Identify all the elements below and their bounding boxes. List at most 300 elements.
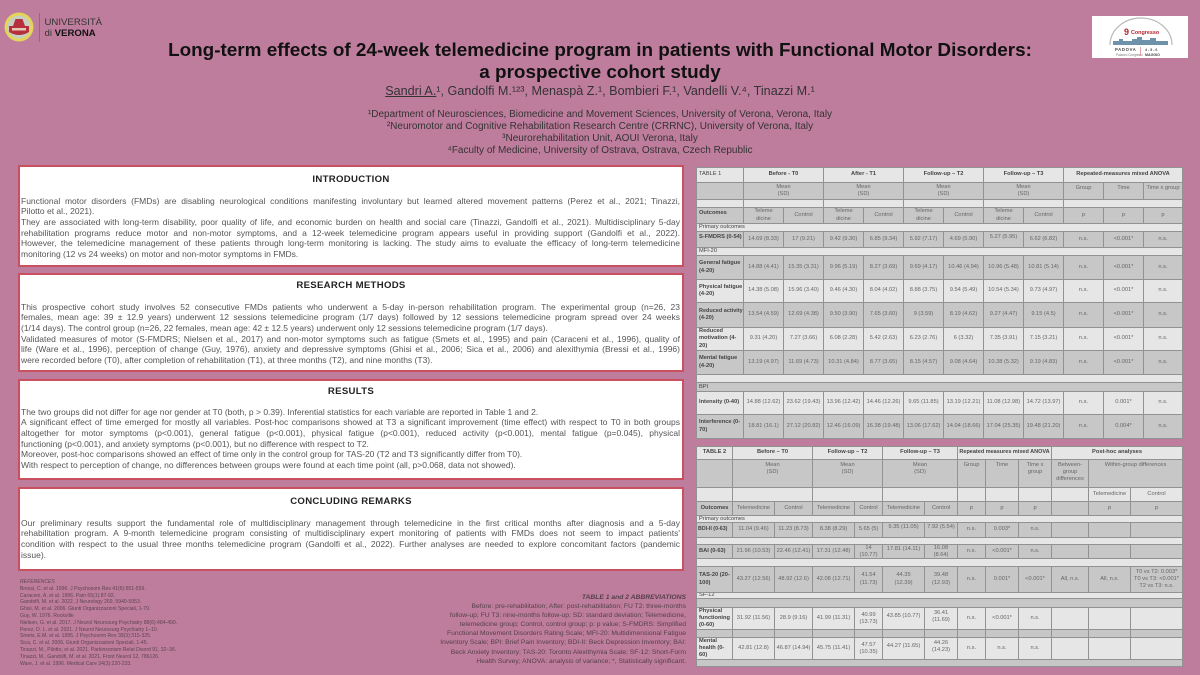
text: conclusions body (21, 518, 680, 560)
table 2: 14 (865, 545, 872, 551)
panel: results (18, 379, 684, 480)
table 1: 15.35 (3.31) (788, 264, 819, 270)
table 1: 11.69 (4.73) (788, 359, 819, 365)
table 1: n.s. (1079, 423, 1088, 429)
references: Bressi, C. et al. 1996. J Psychosom Res 41(6):551-559. (20, 586, 146, 592)
table 1: 5.42 (2.63) (870, 335, 897, 341)
table 1: 8.04 (4.02) (870, 287, 897, 293)
references: Nielsen, G. et al. 2017. J Neurol Neurosurg Psychiatry 88(6):484-490. (20, 620, 177, 626)
table 2: n.s. (1030, 548, 1040, 554)
table 2: functioning (699, 615, 730, 621)
affiliations: ²Neuromotor and Cognitive Rehabilitation Research Centre (CRRNC), University of Verona, Italy (387, 121, 813, 132)
table 2: All, n.s. (1061, 576, 1079, 582)
table 1: 9.73 (4.97) (1030, 287, 1057, 293)
abbreviations note: Health Survey; ANOVA: analysis of variance; *, Statistically significant. (476, 658, 686, 665)
table 1: 9.96 (5.19) (830, 264, 857, 270)
references: Perez, D. L. et al. 2021. J Neurol Neurosurg Psychiatry 1–10. (20, 627, 158, 633)
table 1: (SD) (778, 191, 789, 197)
abbreviations note (440, 594, 686, 665)
heading: results: RESULTS (328, 386, 374, 396)
table 1: 13.96 (12.42) (827, 399, 860, 405)
table 1: Outcomes (699, 210, 727, 216)
table 1: 12.46 (16.09) (827, 423, 860, 429)
icon: skyline and dome: Palazzo Congressi (1116, 53, 1143, 57)
table 1: 4.69 (5.90) (950, 236, 977, 242)
table 1: Mean (856, 184, 871, 190)
table 2: n.s. (967, 576, 976, 582)
table 2: Primary outcomes (699, 516, 745, 522)
table 1: Time x group (1147, 185, 1180, 191)
table 2: T0 vs T3: <0.001* (1134, 576, 1179, 582)
table 2: <0.001* (992, 548, 1012, 554)
table 1: 9.08 (4.64) (950, 359, 977, 365)
table 1: 19.48 (21.20) (1027, 423, 1060, 429)
abbreviations note: follow-up; FU T3: nine-months follow-up; SD: standard deviation; Telemedicine, (450, 612, 686, 619)
table 2: Telemedicine (737, 505, 770, 511)
table 1: 7.65 (3.60) (870, 311, 897, 317)
table 1: 9.27 (4.47) (990, 311, 1017, 317)
table 1: 10.54 (5.34) (988, 287, 1019, 293)
title: a prospective cohort study (479, 62, 721, 82)
table 1: (SD) (1018, 191, 1029, 197)
table 2: 36.41 (934, 610, 948, 616)
heading: introduction: INTRODUCTION (312, 174, 390, 184)
table 2: (13.73) (860, 618, 878, 624)
table 1: n.s. (1158, 399, 1168, 405)
table 2: Control (1147, 491, 1166, 497)
logo wordmark: di VERONA (44, 28, 96, 38)
table 2: p (1155, 505, 1158, 511)
table 1: MFI-20 (699, 248, 717, 254)
table 1: Control (874, 212, 893, 218)
references: Tinazzi, M., Gandolfi, M. et al. 2021. Front Neurol 12, 786126. (20, 654, 159, 660)
table 2: Post-hoc analyses (1092, 449, 1142, 455)
table 1: After - T1 (851, 171, 876, 177)
table 2: 41.99 (11.31) (817, 615, 850, 621)
table 1: 10.96 (5.48) (988, 264, 1019, 270)
table 1: 7.27 (3.66) (790, 335, 817, 341)
table 1: 16.38 (19.48) (867, 423, 900, 429)
table 2: 42.08 (12.71) (817, 576, 850, 582)
table 2: Within-group differences (1105, 462, 1166, 468)
panel: research methods (18, 273, 684, 372)
table 1: p (1161, 212, 1165, 218)
references: REFERENCES (20, 579, 55, 585)
table 2: n.s. (967, 548, 976, 554)
table 1: Reduced (699, 328, 723, 334)
table 2: 8.38 (8.29) (820, 526, 847, 532)
table 1: 27.12 (20.82) (787, 423, 820, 429)
references: Ware, J. et al. 1996. Medical Care 34(3):220-233. (20, 661, 132, 667)
text: results body: Moreover, post-hoc comparisons showed an effect of time only in the control group for TAS-20 (T2 and T3 significantly differ from T0). (21, 449, 522, 459)
table 2: 47.57 (861, 642, 876, 648)
table 1: 13.06 (17.62) (907, 423, 940, 429)
abbreviations note: Beck Anxiety Inventory; TAS-20: Toronto Alexithymia Scale; SF-12: Short-Form (451, 649, 686, 656)
table 1: 7.35 (3.91) (990, 335, 1017, 341)
table 2: n.s. (997, 645, 1007, 651)
text: methods body (21, 302, 680, 365)
table 2: 41.54 (861, 572, 876, 578)
affiliations (368, 109, 832, 156)
text: introduction body: Pilotto et al., 2021). (21, 206, 94, 216)
table 2: TAS-20 (20- (699, 572, 730, 578)
table 1: p (1082, 212, 1085, 218)
table 2: Physical (699, 608, 722, 614)
text: methods body: were recorded before (T0), after completion of rehabilitation (T1), at three months (T2), and nine months (T3). (21, 355, 432, 365)
table 1: Mean (936, 184, 951, 190)
table 1: 9.42 (9.30) (830, 236, 857, 242)
table 1: 13.19 (4.97) (748, 359, 779, 365)
table 1: 7.15 (3.21) (1030, 335, 1057, 341)
table 2: (SD) (914, 469, 926, 475)
table 2: n.s. (967, 645, 976, 651)
table 1: 9 (3.59) (914, 311, 933, 317)
table 2: 46.87 (14.94) (777, 645, 810, 651)
table 2: n.s. (1030, 615, 1040, 621)
table 2: (10.77) (860, 552, 878, 558)
table 1: (SD) (858, 191, 869, 197)
table 1: dicine (996, 216, 1011, 222)
references: Ghisi, M. et al. 2006. Giunti Organizzazioni Speciali, 1-79. (20, 606, 150, 612)
logo: 9th congress (1092, 16, 1188, 58)
table 1: TABLE 1 (699, 171, 721, 177)
table 1: 10.46 (4.94) (948, 264, 979, 270)
panel: concluding remarks (18, 487, 684, 571)
table 1: dicine (916, 216, 931, 222)
title (168, 40, 1032, 82)
table 1: Control (954, 212, 973, 218)
table 1: 70) (699, 426, 707, 432)
table 2: Time (996, 462, 1008, 468)
table 1: 8.15 (4.57) (910, 359, 937, 365)
table 1: Teleme (834, 208, 853, 214)
table 1: <0.001* (1114, 236, 1133, 242)
table 1: <0.001* (1114, 335, 1133, 341)
icon: skyline and dome (1109, 17, 1173, 57)
table 2: 100) (699, 580, 710, 586)
abbreviations note: Inventory Scale; BPI: Brief Pain Inventory; BDI-II: Beck Depression Inventory; BAI: (440, 639, 686, 646)
table 2: Group (964, 462, 979, 468)
table 1: S-FMDRS (0-54) (699, 234, 742, 240)
table 1: n.s. (1158, 423, 1168, 429)
table 1: 6.85 (9.34) (870, 236, 897, 242)
table 2: <0.001* (1025, 576, 1045, 582)
table 1: n.s. (1158, 359, 1168, 365)
table 1 (696, 167, 1183, 439)
table 1: 13.19 (12.21) (947, 399, 980, 405)
table 1: n.s. (1158, 287, 1168, 293)
text: results body: A significant effect of time emerged for mostly all variables. Post-hoc comparisons showed at T3 a significant improvement (time effect) with respect to T0 in both groups (21, 417, 680, 427)
table 1: Group (1076, 185, 1091, 191)
affiliations: ⁴Faculty of Medicine, University of Ostrava, Ostrava, Czech Republic (448, 145, 752, 156)
table 2: 45.75 (11.41) (817, 645, 850, 651)
table 2: 39.48 (934, 572, 948, 578)
table 2: T0 vs T2: 0.003* (1136, 569, 1177, 575)
text: results body (21, 406, 680, 470)
table 1: 5.27 (5.95) (990, 234, 1017, 240)
table 1: 17 (9.21) (792, 236, 815, 242)
table 2: T2 vs T3: n.s. (1139, 583, 1174, 589)
table 1: 10.81 (5.14) (1028, 264, 1059, 270)
table 2: (0-60) (699, 622, 714, 628)
table 2: Follow-up – T3 (900, 449, 940, 455)
table 1: 18.81 (16.1) (748, 423, 779, 429)
table 2: 44.27 (11.65) (887, 643, 920, 649)
table 1: Follow-up – T2 (924, 171, 963, 177)
abbreviations note: Functional Movement Disorders Rating Scale; MFI-20: Multidimensional Fatigue (447, 630, 686, 637)
text: results body: functioning (p<0.001), and anxiety symptoms (p<0.001), but no difference with respect to T2. (21, 439, 369, 449)
table 1: 14.38 (5.08) (748, 287, 779, 293)
table 1: 9.15 (4.5) (1031, 311, 1056, 317)
text: introduction body: Functional motor disorders (FMDs) are disabling neurological conditions manifesting involuntary but learned altered movement patterns (Perez et al., 2021; Tinazzi, (21, 196, 680, 206)
table 1: <0.001* (1114, 264, 1133, 270)
table 1: 9.31 (4.20) (750, 335, 777, 341)
table 1: Follow-up – T3 (1004, 171, 1043, 177)
table 1: 8.27 (3.69) (870, 264, 897, 270)
table 2: differences (1056, 476, 1084, 482)
table 1: 6.62 (6.82) (1030, 236, 1057, 242)
table 2: Outcomes (701, 505, 728, 511)
text: introduction body: They are associated with long-term disability, poor quality of life, and economic burden on health and social care (Tinazzi, Gandolfi et al., 2021). Multidisciplinary 5-day (21, 217, 680, 227)
table 1: Mean (776, 184, 791, 190)
table 2: 21.96 (10.53) (737, 548, 770, 554)
table 2: (12.39) (894, 580, 913, 586)
table 1: (4-20) (699, 268, 714, 274)
abbreviations note: telemedicine group; Control, control group; p: p value; S-FMDRS: Simplified (460, 621, 686, 628)
table 1: 10.38 (5.32) (988, 359, 1019, 365)
table 2: Follow-up – T2 (828, 449, 867, 455)
table 2: 48.92 (12.6) (778, 576, 809, 582)
table 1: Teleme (994, 208, 1013, 214)
table 2: 28.9 (9.16) (780, 615, 807, 621)
abbreviations note: Before: pre-rehabilitation; After: post-rehabilitation; FU T2: three-months (472, 603, 686, 610)
table 2: Telemedicine (1093, 491, 1126, 497)
table 1: motivation (4- (699, 335, 736, 341)
text: conclusions body: Our preliminary results support the fundamental role of multidisciplinary management through telemedicine in the first critical months after diagnosis and a 5-day (21, 518, 680, 528)
table 2: 31.92 (11.56) (737, 615, 770, 621)
table 1: n.s. (1079, 311, 1088, 317)
table 2: p (1000, 505, 1004, 511)
table 1: Repeated-measures mixed ANOVA (1076, 171, 1170, 177)
table 2: n.s. (967, 615, 976, 621)
table 2: Mental (699, 638, 717, 644)
table 1: 11.08 (12.98) (987, 399, 1020, 405)
table 1: dicine (756, 216, 771, 222)
table 2: 16.08 (934, 545, 948, 551)
table 1: Before - T0 (769, 171, 798, 177)
references: Smets, E.M. et al. 1995. J Psychosom Res 39(3):315-325. (20, 633, 151, 639)
table 1: Mental fatigue (699, 355, 737, 361)
table 2: (8.64) (934, 552, 948, 558)
divider bar (39, 13, 40, 42)
table 2: 60) (699, 652, 707, 658)
table 1: 13.54 (4.59) (748, 311, 779, 317)
table 2: BAI (0-63) (699, 548, 726, 554)
table 2: Before – T0 (757, 449, 788, 455)
table 1: 14.46 (12.26) (867, 399, 900, 405)
table 2: n.s. (967, 526, 976, 532)
table 1: 6.08 (2.28) (830, 335, 857, 341)
table 1: 9.46 (4.30) (830, 287, 857, 293)
table 1: 14.72 (13.97) (1027, 399, 1060, 405)
text: methods body: (1/14 days). The control group (n=26, 22 females, mean age: 42 ± 12.5 years) underwent only 12 sessions telemedicine program (1/7 days). (21, 323, 548, 333)
table 1: General fatigue (699, 260, 740, 266)
references (20, 579, 177, 667)
table 2: (SD) (767, 469, 778, 475)
table 2: (12.93) (932, 580, 950, 586)
text: methods body: life (Ware et al., 1996), perception of change (Guy, 1976), anxiety and depressive symptoms (Ghisi et al., 2006; Sica et al., 2006) and alexithymia (Bressi et al., 1996) (21, 344, 680, 354)
table 2: Repeated measures mixed ANOVA (959, 449, 1050, 455)
text: introduction body: rehabilitation programs reduce motor and non-motor symptoms, and a 12-week telemedicine program appears useful in providing support (Gandolfi et al., 2022). (21, 228, 680, 238)
table 1: n.s. (1158, 311, 1168, 317)
table 2: 17.31 (12.48) (817, 548, 850, 554)
table 1: 0.001* (1115, 399, 1132, 405)
table 1: 9.54 (5.49) (950, 287, 977, 293)
table 2: 5.65 (5) (859, 526, 878, 532)
table 1: Mean (1016, 184, 1031, 190)
table 1: 15.96 (3.40) (788, 287, 819, 293)
table 2: 9.35 (11.05) (888, 524, 919, 530)
table 1: 8.88 (3.75) (910, 287, 937, 293)
heading: concluding remarks: CONCLUDING REMARKS (290, 496, 412, 506)
authors: Sandri A.¹, Gandolfi M.¹²³, Menaspà Z.¹, Bombieri F.¹, Vandelli V.⁴, Tinazzi M.¹ (385, 84, 815, 98)
table 2: 43.85 (10.77) (887, 613, 920, 619)
table 2: All, n.s. (1100, 576, 1119, 582)
table 2: Between- (1058, 462, 1082, 468)
table 1: p (1122, 212, 1125, 218)
table 1: <0.001* (1114, 287, 1133, 293)
table 1: 9.69 (4.17) (910, 264, 937, 270)
table 1: 14.69 (8.33) (748, 236, 779, 242)
icon: skyline and dome: 9 (1124, 27, 1129, 37)
references: Sica, C. et al. 2006. Giunti Organizzazioni Speciali, 1-45. (20, 640, 148, 646)
table 1: 20) (699, 343, 707, 349)
affiliations: ¹Department of Neurosciences, Biomedicine and Movement Sciences, University of Verona, Verona, Italy (368, 109, 832, 120)
affiliations: ³Neurorehabilitation Unit, AOUI Verona, Italy (502, 133, 698, 144)
table 1: n.s. (1079, 399, 1088, 405)
table 2: 44.35 (896, 572, 911, 578)
table 2: 7.92 (5.54) (927, 524, 955, 530)
logo wordmark: UNIVERSITÀ (44, 17, 102, 28)
table 1: n.s. (1158, 335, 1168, 341)
table 1: <0.001* (1114, 359, 1133, 365)
table 1: BPI (699, 384, 708, 390)
panel: introduction (18, 165, 684, 267)
title: Long-term effects of 24-week telemedicine program in patients with Functional Motor Disorders: (168, 40, 1032, 61)
table 2: TABLE 2 (703, 449, 726, 455)
table 2: (11.73) (860, 580, 877, 586)
table 1: 12.69 (4.38) (788, 311, 819, 317)
table 1: 14.04 (18.66) (947, 423, 980, 429)
table 1: Intensity (0-40) (699, 399, 739, 405)
text: results body: The two groups did not differ for age nor gender at T0 (both, p > 0.39). Inferential statistics for each variable are reported in Table 1 and 2. (21, 406, 538, 416)
table 2 (696, 446, 1183, 667)
table 1: Primary outcomes (699, 224, 745, 230)
table 2: health (0- (699, 645, 724, 651)
text: introduction body: monitoring (12 vs 24 weeks) on motor and non-motor symptoms in FMDs. (21, 249, 298, 259)
icon: skyline and dome: Congresso (1131, 30, 1160, 36)
table 1: (SD) (938, 191, 949, 197)
table 1: 14.88 (12.62) (747, 399, 780, 405)
table 1: (4-20) (699, 315, 714, 321)
references: Caraceni, A. et al. 1996. Pain 65(1):87-92. (20, 593, 115, 599)
table 2: Time x (1027, 462, 1043, 468)
table 2: Control (932, 505, 950, 511)
table 1: (4-20) (699, 291, 714, 297)
table 2: (14.23) (932, 646, 950, 652)
table 2: p (970, 505, 973, 511)
table 2: Control (859, 505, 878, 511)
table 2: (11.69) (932, 616, 950, 622)
table 2: 44.26 (934, 640, 948, 646)
table 2: <0.001* (992, 615, 1012, 621)
logo: University of Verona (4, 12, 102, 42)
text: results body: With respect to perception of change, no differences between groups were found at each time point (all, p>0.068, data not showed). (21, 460, 516, 470)
text: methods body: females, mean age: 39 ± 12.9 years) underwent 12 sessions telemedicine program (1/7 days) followed by 12 sessions telemedicine program spread over 24 weeks (21, 312, 680, 322)
table 2: p (1033, 505, 1037, 511)
table 1: 23.62 (19.43) (787, 399, 820, 405)
logo wordmark (44, 17, 102, 38)
table 1: 5.92 (7.17) (910, 236, 937, 242)
table 2: Mean (913, 462, 927, 468)
table 2: 40.99 (861, 612, 876, 618)
table 1: n.s. (1079, 335, 1088, 341)
table 1: Control (1034, 212, 1053, 218)
text: conclusions body: issue). (21, 550, 46, 560)
table 2: group (1028, 469, 1042, 475)
table 2: 0.001* (994, 576, 1010, 582)
table 1: Time (1117, 185, 1130, 191)
table 1: 6 (3.32) (954, 335, 973, 341)
table 2: Mean (765, 462, 780, 468)
icon: skyline and dome: PADOVA (1115, 47, 1136, 52)
table 1: 9.65 (11.85) (908, 399, 939, 405)
text: introduction body: However, the telemedicine management of these patients through long-term monitoring is lacking. The study aims to evaluate the efficacy of long-term telemedicine (21, 238, 680, 248)
table 2: (10.35) (860, 648, 878, 654)
table 1: (4-20) (699, 362, 714, 368)
references: Guy, W. 1976. Rockville (20, 613, 74, 619)
table 2: 11.23 (8.73) (778, 526, 809, 532)
references: Tinazzi, M., Pilotto, et al. 2021. Parkinsonism Relat Disord 91, 32–36. (20, 647, 176, 653)
table 1: 6.23 (2.76) (910, 335, 937, 341)
table 2: Telemedicine (817, 505, 850, 511)
table 1: Reduced activity (699, 308, 743, 314)
abbreviations note: TABLE 1 and 2 ABBREVIATIONS (582, 594, 686, 601)
table 1: Physical fatigue (699, 284, 742, 290)
table 1: 8.77 (3.65) (870, 359, 897, 365)
table 2: 0.003* (994, 526, 1010, 532)
table 2: 17.81 (14.11) (887, 546, 920, 552)
table 1: n.s. (1158, 236, 1168, 242)
table 1: 10.31 (4.84) (828, 359, 859, 365)
table 1: n.s. (1158, 264, 1168, 270)
table 1: n.s. (1079, 236, 1088, 242)
table 2: 11.04 (9.46) (738, 526, 769, 532)
table 2: Control (784, 505, 803, 511)
icon: skyline and dome: 4 - 5 - 6 (1145, 48, 1157, 52)
text: conclusions body: rehabilitation program. A 9-month telemedicine program consisting of multidisciplinary expert monitoring of patients with FMDs does not seem to impact patients' (21, 528, 680, 538)
table 1: n.s. (1079, 359, 1088, 365)
table 2: group (1063, 469, 1077, 475)
table 1: n.s. (1079, 264, 1088, 270)
table 1: 17.04 (25.35) (987, 423, 1020, 429)
text: methods body: This prospective cohort study involves 52 consecutive FMDs patients who underwent a 5-day in-person rehabilitation program. The experimental group (n=26, 23 (21, 302, 680, 312)
table 1: <0.001* (1114, 311, 1133, 317)
table 2: p (1108, 505, 1111, 511)
text: results body: altogether for motor symptoms (p<0.001), general fatigue (p<0.001), physical fatigue (p<0.001), reduced activity (p<0.001), mental fatigue (p=0.045), physical (21, 428, 680, 438)
table 2: n.s. (1030, 526, 1040, 532)
icon: university seal (4, 12, 34, 42)
